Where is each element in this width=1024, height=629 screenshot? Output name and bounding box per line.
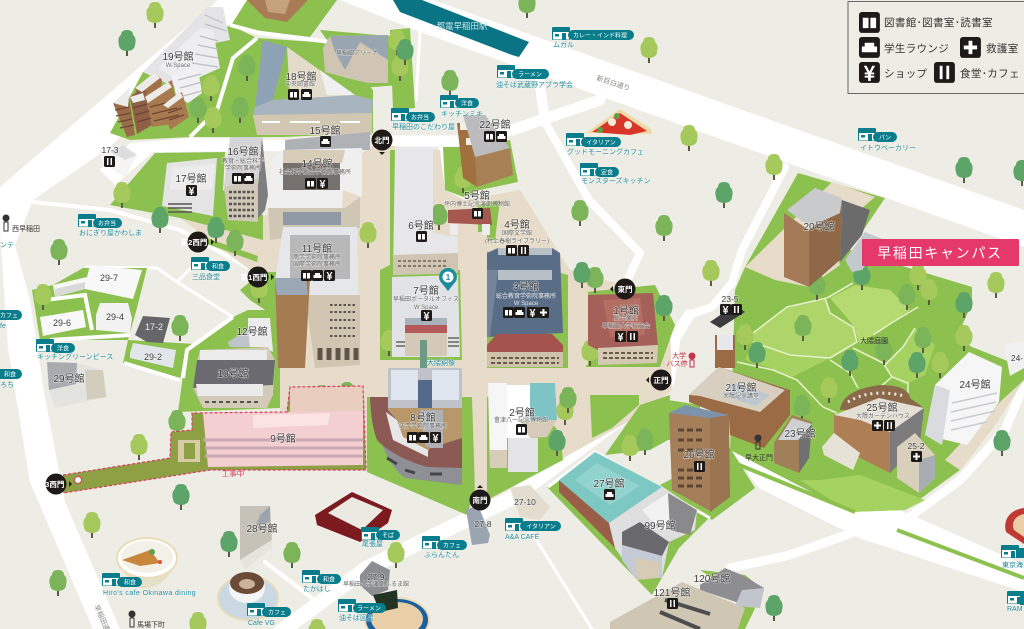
building 7 (392, 275, 460, 368)
shop: Ito Bakery (858, 128, 916, 152)
shop: Mughal (552, 27, 634, 49)
shop: Cafe VG: Cafe VG (248, 620, 275, 627)
shop: Mughal: カレー・インド料理 (573, 32, 627, 40)
shop: Sanpin Shokudo: 三品食堂 (192, 272, 220, 281)
building 17-3 (100, 145, 137, 177)
shop: Ito Bakery: イトウベーカリー (860, 144, 916, 152)
shop: Takahashi: 和食 (323, 576, 335, 584)
food: bowl (117, 538, 177, 588)
shop: Abura Gakkai: ラーメン (518, 72, 542, 78)
shop: Owariya: 尾張屋 (362, 540, 383, 548)
shop: Owariya (361, 527, 400, 548)
building 18 (253, 40, 373, 135)
building 25: 大隈ガーデンハウス (856, 412, 910, 420)
bus stops: 早大正門 (745, 453, 773, 462)
campus gates (38, 130, 672, 510)
legend: shop (859, 62, 928, 83)
gate: main: 正門 (654, 376, 668, 385)
building 19: 19号館 (162, 50, 194, 63)
shop: cut-off left washoku: ろち (0, 381, 14, 389)
shop: cut-off left cafe (0, 310, 22, 330)
building 26: 26号館 (683, 448, 715, 461)
building 12 (228, 318, 273, 352)
shop: Monsters Kitchen: モンスターズキッチン (581, 176, 651, 185)
building 9 with construction site (63, 386, 366, 493)
building 27-8: 27-8 (474, 519, 492, 529)
shop: Kitchen Miki: 洋食 (461, 100, 473, 108)
small hall: 早稲田アリーナ (336, 49, 378, 57)
shop: cut-off left washoku (0, 369, 22, 389)
gate: west 1: 第1西門 (241, 272, 267, 282)
building 2: 2号館 (509, 406, 535, 419)
gate: north (372, 130, 392, 155)
building 28: 28号館 (246, 522, 278, 535)
shop: Kodawariya: お弁当 (411, 114, 429, 122)
shop: Kitchen Miki (440, 95, 483, 118)
building 11: 商学学術院事務所 (293, 253, 341, 261)
building 6 (393, 147, 458, 275)
building 25: 25号館 (866, 401, 898, 414)
shop: Onigiri Kawashima: おにぎり屋かわしま (79, 228, 142, 237)
building 19: W-Space (166, 63, 191, 69)
building 3 and 4 (485, 218, 563, 367)
shop: Kodawariya: 早稲田のこだわり屋 (392, 122, 455, 131)
building 23: 23号館 (784, 427, 816, 440)
shop: Onigiri Kawashima (78, 214, 142, 237)
station: Toden Waseda (393, 0, 529, 57)
building 5: 坪内博士記念演劇博物館 (444, 200, 510, 208)
building 11 (275, 227, 360, 368)
shop: Abura Gakkai (496, 65, 573, 89)
shop: Kitchen Miki: キッチンミキ (441, 110, 483, 118)
shop: cut-off left label: ンテ (0, 241, 14, 249)
shop: RAM (1007, 591, 1024, 613)
shop: A&A Cafe: イタリアン (526, 522, 556, 530)
shop: Cafe VG: カフェ (268, 610, 286, 616)
shop: cut-off left cafe: fe (0, 323, 6, 330)
shop: Hiro's cafe: 和食 (124, 578, 136, 586)
building 99: 99号館 (644, 519, 676, 532)
building 27-8 (466, 505, 492, 545)
campus name banner (862, 239, 1019, 266)
shop: Cafe VG (247, 603, 291, 627)
green stripes on avenue (732, 462, 1024, 578)
legend: shop: ショップ (884, 68, 928, 80)
shop: Monsters Kitchen (580, 163, 651, 185)
shop: Abura Gakkai: 油そば武蔵野アブラ学会 (496, 80, 573, 89)
building 21: 大隈記念講堂 (723, 392, 759, 400)
building 14: 14号館 (301, 157, 333, 170)
building 7: 7号館 (413, 284, 439, 297)
building 21: 21号館 (725, 381, 757, 394)
building 27: 27号館 (593, 477, 625, 490)
food: ramen (365, 590, 429, 629)
building 23 (774, 415, 816, 473)
building 10 (193, 347, 275, 408)
building 3 and 4: (村上春樹ライブラリー) (485, 237, 549, 245)
gate: east: 東門 (618, 284, 632, 294)
building 121 (610, 582, 745, 629)
gate: west 3 (38, 474, 72, 494)
building 29 group: 29-2 (144, 352, 162, 362)
bus stops (2, 214, 773, 629)
building 99 (609, 487, 697, 580)
building 27-9: 早稲田大学演劇ふるま館 (343, 580, 409, 588)
shop: Aburasoba Zuboshi (338, 599, 386, 622)
shop: Hiro's cafe (102, 573, 196, 597)
building 7: 早稲田ポータルオフィス (393, 295, 459, 303)
legend: library (859, 12, 993, 33)
building 20 (784, 188, 885, 287)
building 19 (113, 7, 230, 137)
gate: south: 南門 (472, 495, 488, 505)
building 16: 16号館 (227, 145, 259, 158)
building 14: 社会科学総合学術院事務所 (279, 168, 351, 176)
building 5: 5号館 (464, 189, 490, 202)
white campus paths (45, 25, 710, 518)
shop: Ito Bakery: パン (879, 134, 891, 142)
building 18: 中央図書館 (285, 80, 315, 88)
beige forecourts (468, 182, 1024, 505)
building 1: 1号館 (613, 304, 639, 317)
building 27-9: 27-9 (367, 572, 385, 582)
building 9 with construction site: 9号館 (270, 432, 296, 445)
shop: A&A Cafe: A&A CAFÉ (505, 532, 540, 541)
building 24: 24- (1011, 353, 1023, 363)
building 18: 18号館 (285, 70, 317, 83)
building 20: 20号館 (803, 220, 835, 233)
shop: Aburasoba Zuboshi: 油そば図星 (339, 613, 374, 622)
shop: Monsters Kitchen: 定食 (601, 168, 613, 176)
building 5 (444, 189, 510, 235)
gate: west 3: 第3西門 (38, 479, 64, 489)
shop: Takahashi (302, 570, 341, 593)
shop: Owariya: そば (382, 532, 394, 540)
gate: main (646, 370, 672, 390)
shop: Kitchen Green Peace (36, 339, 113, 361)
location pin: 1 (446, 273, 451, 282)
shop: Kodawariya (391, 108, 455, 131)
building 3 and 4: 総合教育学術院事務所 (496, 292, 556, 300)
building 8 (370, 368, 462, 485)
shop: Furantan (422, 536, 467, 559)
building 11: 11号館 (302, 242, 332, 255)
building 2 (488, 383, 557, 472)
main campus ground (180, 146, 672, 505)
building 25-2 (897, 433, 935, 493)
building 12: 12号館 (236, 325, 268, 338)
shop: Furantan: カフェ (443, 542, 461, 550)
gate: north: 北門 (374, 135, 390, 145)
legend (848, 2, 1024, 94)
building 22 (457, 115, 513, 187)
building 1: 総合案内 (614, 314, 638, 322)
building 25 (822, 385, 924, 473)
building 17: 17号館 (175, 172, 207, 185)
shop: Good Morning Cafe: グッドモーニングカフェ (567, 147, 644, 156)
garden paths (737, 283, 918, 413)
garden lawn (745, 285, 935, 512)
gate: east (610, 278, 636, 300)
legend: cafeteria: 食堂･カフェ (960, 68, 1020, 80)
shop: Furantan: ふらんたん (424, 551, 459, 559)
legend: first aid: 救護室 (986, 42, 1019, 55)
building 27 (559, 452, 662, 548)
food: coffee (218, 572, 278, 620)
building 25-2: 25-2 (907, 441, 925, 451)
shop: Onigiri Kawashima: お弁当 (98, 220, 116, 228)
shop: A&A Cafe (505, 518, 561, 541)
building 7: W Space (414, 305, 439, 311)
shop: Takahashi: たかはし (303, 585, 331, 593)
shop: Good Morning Cafe: イタリアン (586, 138, 616, 146)
building 1: 早稲田大学校友会 (602, 322, 650, 330)
bus stops: 馬場下町 (137, 620, 165, 629)
station: Toden Waseda: 都電早稲田駅 (436, 21, 488, 31)
building 27-10: 27-10 (514, 497, 536, 507)
building 3 and 4: 3号館 (513, 280, 539, 293)
legend: lounge (859, 37, 949, 58)
gate: west 2: 第2西門 (181, 237, 207, 247)
building 9 with construction site: 工事中 (222, 468, 244, 478)
building 26 (669, 405, 730, 512)
bus stops: バス停 (666, 359, 688, 368)
campus name banner: 早稲田キャンパス (877, 245, 1003, 261)
building 15 (285, 124, 370, 150)
food: soba tray (315, 492, 392, 542)
food: bowl at right edge (1005, 508, 1024, 544)
building 16: 学術院事務所 (225, 164, 261, 172)
building 8: 法学学術院事務所 (399, 422, 447, 430)
bus stops: 西早稲田 (12, 224, 40, 233)
building 3 and 4: 4号館 (504, 218, 530, 231)
legend: library: 図書館･図書室･読書室 (884, 16, 993, 29)
building 28 (240, 506, 278, 570)
shop: Aburasoba Zuboshi: ラーメン (357, 606, 381, 612)
building 23-5: 23-5 (721, 294, 739, 304)
shop: RAM: RAM (1007, 606, 1023, 613)
building 29 group: 29-4 (106, 312, 124, 322)
building 29 group: 29-7 (100, 273, 118, 283)
building 3 and 4: W Space (514, 301, 539, 307)
garden label: 大隈庭園 (860, 336, 888, 345)
building 29 group: 17-2 (145, 322, 163, 332)
small hall (323, 35, 388, 83)
building 27-9 (343, 561, 409, 596)
shop: Kitchen Green Peace: キッチングリーンピース (37, 352, 113, 361)
building 121: 121号館 (654, 586, 690, 599)
Okuma statue label: 大隈銅像 (427, 358, 455, 367)
shop: cut-off left cafe: カフェ (0, 312, 18, 320)
location pin (439, 268, 457, 291)
road names (92, 73, 631, 629)
legend: first aid (960, 37, 1019, 58)
building 22: 22号館 (479, 118, 511, 131)
building 24 (925, 340, 1024, 445)
building 17 (162, 158, 217, 216)
building: top brown (247, 0, 308, 22)
shop: Tokyo Kaisen: 東京海 (1002, 560, 1023, 569)
building 29 group: 29号館 (53, 372, 85, 385)
legend: lounge: 学生ラウンジ (884, 42, 949, 55)
shop: Sanpin Shokudo: 和食 (212, 262, 224, 270)
building 21 (689, 335, 790, 448)
bus stops: 大学 (672, 351, 686, 360)
shop: Hiro's cafe: Hiro's cafe Okinawa dining (103, 590, 196, 597)
road names: 新目白通り (595, 73, 631, 93)
shop: Tokyo Kaisen (1001, 545, 1024, 569)
shop: Kitchen Green Peace: 洋食 (57, 344, 69, 352)
building 8: 8号館 (410, 411, 436, 424)
shop: Mughal: ムガル (553, 40, 574, 49)
building 23-5 (710, 294, 745, 328)
building 3 and 4: 国際文学館 (502, 229, 532, 237)
building 17-3: 17-3 (101, 145, 119, 155)
building 16 (222, 137, 268, 222)
gate: south (470, 485, 490, 510)
shop: Good Morning Cafe (566, 133, 644, 156)
building 11: 国際学術院事務所 (293, 260, 341, 268)
building 120 (694, 568, 764, 608)
building 2: 會津八一記念博物館 (494, 416, 548, 424)
building 29 group (40, 265, 176, 408)
building 16: 教育・総合科学 (222, 157, 264, 165)
building 6: 6号館 (408, 219, 434, 232)
shop: cut-off left washoku: 和食 (4, 370, 16, 378)
legend: cafeteria (934, 62, 1020, 83)
building 14 (265, 148, 362, 240)
food: pizza (586, 109, 652, 135)
building 27-10 (510, 485, 550, 520)
building 10: 10号館 (217, 367, 249, 380)
building 24: 24号館 (959, 378, 991, 391)
shop: Sanpin Shokudo (191, 257, 230, 281)
building 29 group: 29-6 (53, 318, 71, 328)
gate: west 1 (241, 266, 274, 288)
gate: west 2 (181, 232, 214, 252)
building 15: 15号館 (309, 124, 341, 137)
building 1 (588, 293, 658, 365)
building 120: 120号館 (694, 572, 730, 585)
